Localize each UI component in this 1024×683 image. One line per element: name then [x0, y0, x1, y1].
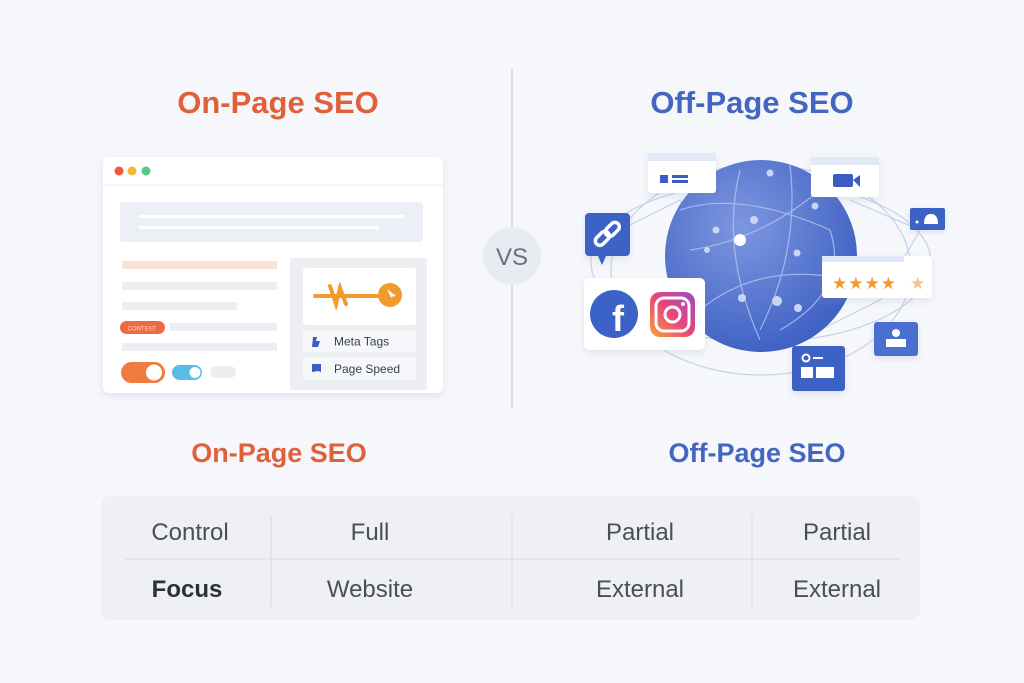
comparison table: Control: [151, 519, 229, 546]
page speed item: Page Speed: [334, 362, 400, 376]
comparison table: Full: [351, 519, 389, 546]
icon: key: [315, 286, 378, 304]
sidebar panel: [290, 258, 427, 390]
content tag: CONTENT: [128, 326, 157, 332]
illustration: globe network: [584, 153, 945, 391]
card: video: [811, 157, 879, 197]
title: on-page: On-Page SEO: [177, 85, 379, 120]
icon: layout card: [792, 346, 845, 391]
vs badge: [483, 227, 541, 285]
card: rating: ★★★★: [832, 274, 897, 293]
heading: off-page: Off-Page SEO: [668, 438, 846, 468]
vs badge: VS: [496, 244, 528, 271]
icon: facebook: f: [612, 298, 625, 339]
card: top-left: [648, 153, 716, 193]
comparison table: Partial: [803, 519, 871, 546]
icon: instagram: [650, 292, 695, 337]
heading: on-page: On-Page SEO: [191, 438, 367, 468]
meta tags item: Meta Tags: [334, 334, 389, 348]
icon: link bubble: [585, 213, 630, 265]
card: rating: [822, 256, 932, 298]
toggles: [121, 362, 236, 383]
comparison table: External: [596, 576, 684, 603]
comparison table: Focus: [152, 576, 222, 603]
icon: profile card: [874, 322, 918, 356]
comparison table: [101, 496, 920, 620]
comparison table: Partial: [606, 519, 674, 546]
icon: bell card: [910, 208, 945, 230]
card: rating: ★: [910, 274, 925, 293]
title: off-page: Off-Page SEO: [650, 85, 854, 120]
divider: [511, 68, 513, 408]
content tag: [120, 321, 165, 334]
panel: browser mockup: [103, 157, 443, 393]
comparison table: External: [793, 576, 881, 603]
panel: social card: [584, 278, 705, 350]
comparison table: Website: [327, 576, 413, 603]
